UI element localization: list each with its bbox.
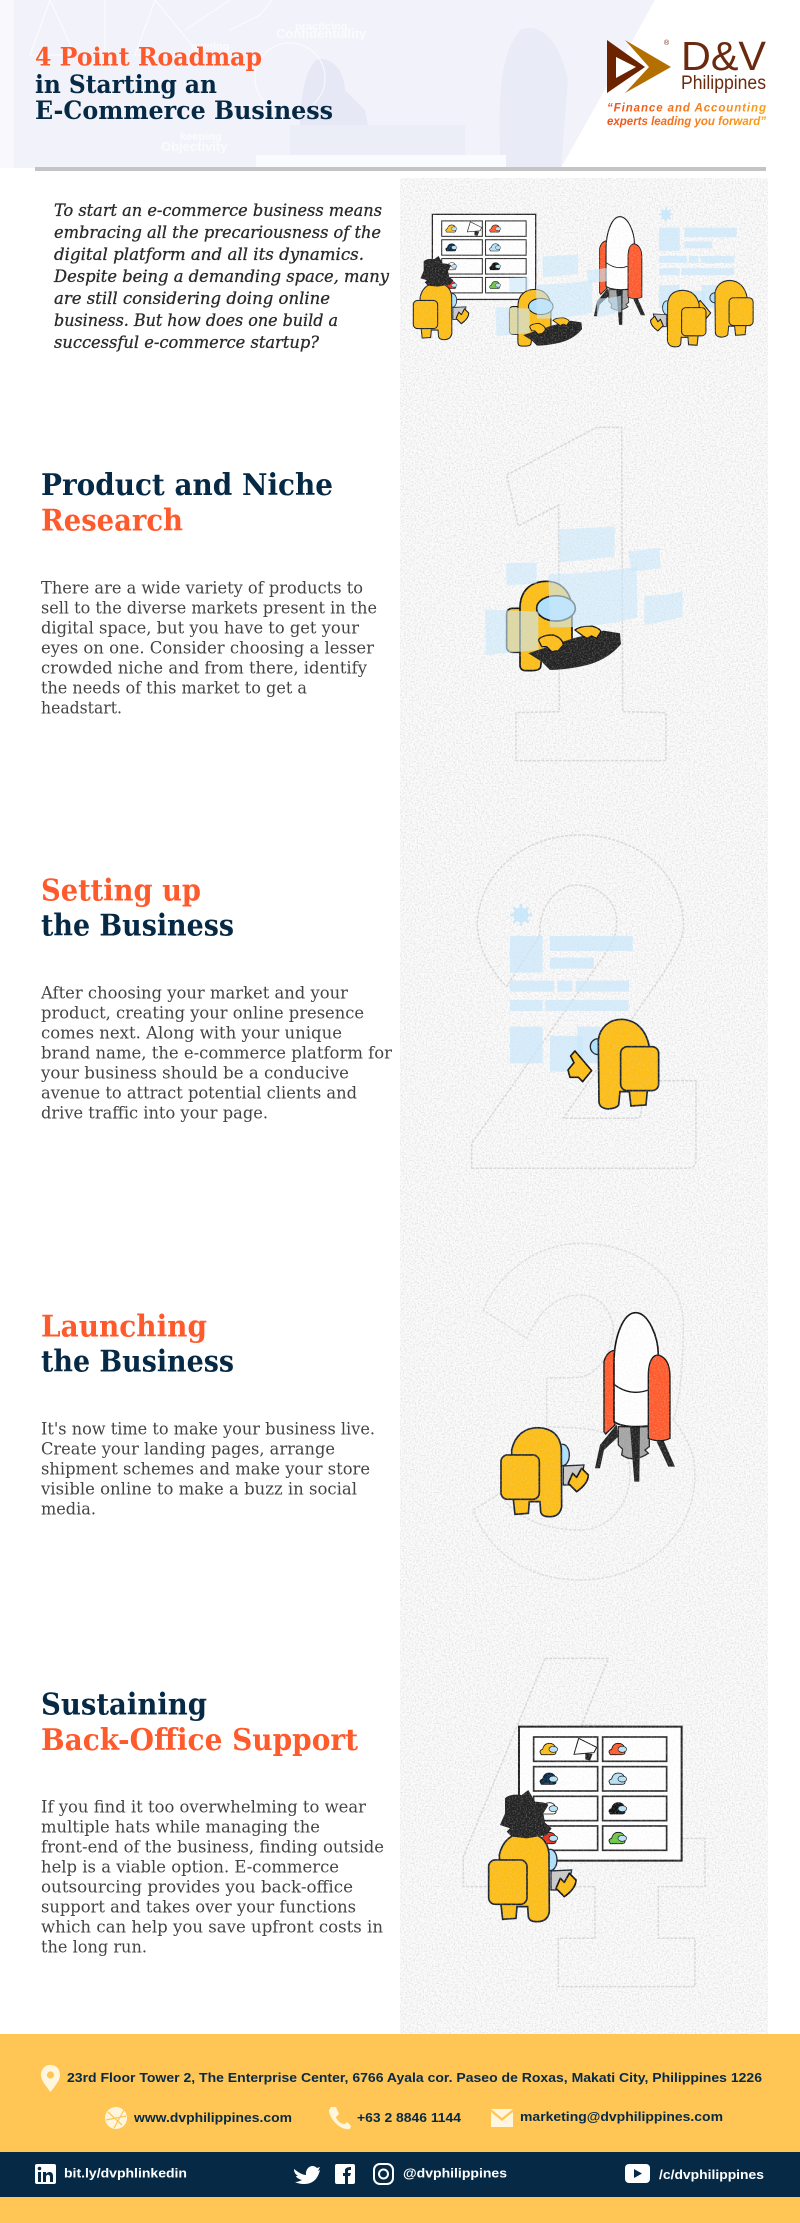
illustration: crewmate reviewing web layout (510, 904, 659, 1109)
intro text: successful e-commerce startup? (54, 333, 319, 352)
icon: globe (105, 2107, 127, 2129)
logo: D&V Philippines: D&V (681, 33, 767, 79)
section 2 text (40, 983, 393, 1123)
logo: D&V Philippines: ® (664, 39, 670, 47)
section 2 heading: the Business (41, 909, 234, 944)
numeral 1 outline (507, 427, 666, 761)
section 3 text: shipment schemes and make your store (41, 1459, 370, 1479)
section 3 heading: the Business (41, 1345, 234, 1380)
icon: location pin (41, 2065, 60, 2092)
section 1 text (41, 578, 377, 718)
icon: Twitter (294, 2166, 320, 2184)
LinkedIn link: bit.ly/dvphlinkedin (64, 2166, 187, 2181)
section 2 text: product, creating your online presence (41, 1003, 364, 1023)
panel: grainy illustration column (400, 178, 768, 2034)
section 2 text: After choosing your market and your (40, 983, 349, 1003)
illustration: crewmate with tablet and rocket (501, 1313, 675, 1517)
section 3 text: It's now time to make your business live. (41, 1419, 375, 1439)
section 4 text: which can help you save upfront costs in (41, 1917, 383, 1937)
header banner: practicing (295, 21, 348, 33)
intro illustration: team with board, rocket and forms (413, 207, 753, 347)
Instagram handle: @dvphilippines (403, 2166, 507, 2180)
title (35, 43, 333, 125)
footer contact band (0, 2034, 800, 2223)
section 4 heading: Back-Office Support (41, 1723, 358, 1758)
header banner: keeping (180, 131, 222, 143)
section 2 text: brand name, the e-commerce platform for (41, 1043, 393, 1063)
phone number: +63 2 8846 1144 (357, 2110, 462, 2125)
section 4 text: help is a viable option. E-commerce (41, 1857, 339, 1877)
intro text: To start an e-commerce business means (54, 201, 382, 220)
section 2 text: comes next. Along with your unique (41, 1023, 342, 1043)
header banner: Confidentiality (276, 26, 367, 41)
website: www.dvphilippines.com (133, 2110, 292, 2125)
section 3 text: Create your landing pages, arrange (41, 1439, 335, 1459)
section 1 heading: Research (41, 504, 183, 539)
illustration: crewmate at keyboard with research panels (485, 527, 683, 671)
intro text: digital platform and all its dynamics. (54, 245, 364, 264)
section 2 text: your business should be a conducive (40, 1063, 349, 1083)
header banner: owning (191, 41, 230, 53)
intro text: are still considering doing online (54, 289, 330, 308)
section 1 text: sell to the diverse markets present in the (41, 598, 377, 618)
section 2 text: avenue to attract potential clients and (41, 1083, 357, 1103)
section 3 heading: Launching (41, 1310, 207, 1345)
section 1 heading (41, 468, 333, 539)
section 2 heading: Setting up (41, 874, 201, 909)
section 1 text: There are a wide variety of products to (41, 578, 363, 598)
section 4 text (41, 1797, 384, 1957)
address: 23rd Floor Tower 2, The Enterprise Center, 6766 Ayala cor. Paseo de Roxas, Makati City, Philippines 1226 (67, 2070, 762, 2085)
section 4 heading: Sustaining (41, 1687, 207, 1722)
intro text: business. But how does one build a (54, 311, 338, 330)
section 4 text: multiple hats while managing the (41, 1817, 320, 1837)
logo: D&V Philippines: “Finance and Accounting (607, 102, 766, 114)
section 4 text: front-end of the business, finding outside (41, 1837, 384, 1857)
section 3 text: media. (41, 1499, 96, 1519)
section 3 heading (41, 1310, 234, 1380)
section 4 text: outsourcing provides you back-office (41, 1877, 353, 1897)
section 2 heading (41, 874, 234, 944)
section 1 text: crowded niche and from there, identify (41, 658, 367, 678)
icon: phone (329, 2107, 351, 2129)
title: E-Commerce Business (35, 96, 333, 125)
social bar (0, 2152, 800, 2197)
header banner: Objectivity (161, 139, 228, 154)
icon: Facebook (335, 2164, 355, 2184)
section 1 text: the needs of this market to get a (41, 678, 307, 698)
icon: Instagram (374, 2164, 393, 2184)
numeral 3 outline (473, 1243, 695, 1580)
intro text (53, 201, 390, 352)
intro text: embracing all the precariousness of the (54, 223, 381, 242)
section 4 text: If you find it too overwhelming to wear (41, 1797, 367, 1817)
numeral 2 outline (472, 835, 696, 1168)
logo: D&V Philippines: Philippines (681, 73, 766, 94)
section 3 text (40, 1419, 375, 1519)
section 1 text: eyes on one. Consider choosing a lesser (41, 638, 375, 658)
section 1 text: digital space, but you have to get your (41, 618, 360, 638)
section 3 text: visible online to make a buzz in social (40, 1479, 357, 1499)
title: 4 Point Roadmap (35, 43, 262, 72)
intro text: Despite being a demanding space, many (53, 267, 390, 286)
YouTube channel: /c/dvphilippines (659, 2167, 764, 2182)
logo: D&V Philippines (607, 33, 767, 128)
section 4 text: support and takes over your functions (41, 1897, 356, 1917)
section 1 text: headstart. (41, 698, 122, 718)
icon: YouTube (625, 2164, 650, 2183)
numeral 4 outline (463, 1658, 705, 1987)
section 2 text: drive traffic into your page. (41, 1103, 268, 1123)
icon: envelope (491, 2109, 513, 2127)
section 1 heading: Product and Niche (41, 468, 333, 503)
header banner (0, 0, 655, 168)
section 4 heading (41, 1687, 358, 1758)
logo: D&V Philippines: experts leading you forward” (607, 116, 766, 128)
illustration: crewmate with hat at team board (489, 1727, 682, 1922)
icon: LinkedIn (35, 2164, 56, 2184)
title: in Starting an (35, 70, 217, 99)
email: marketing@dvphilippines.com (520, 2109, 723, 2124)
section 4 text: the long run. (41, 1937, 147, 1957)
